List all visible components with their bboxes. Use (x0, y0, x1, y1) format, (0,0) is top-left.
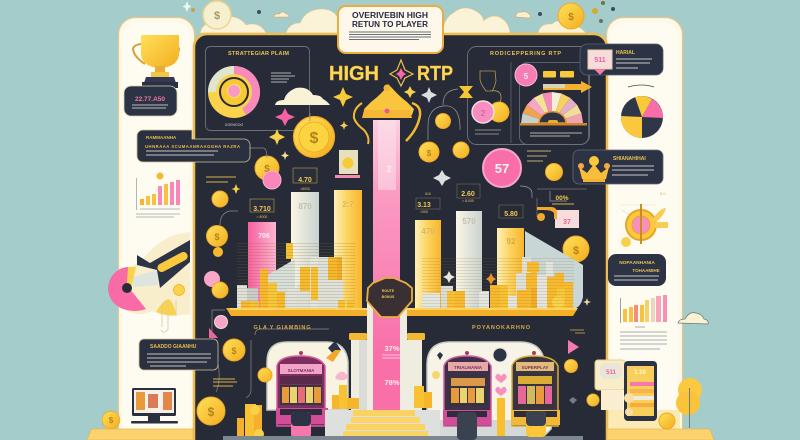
coin: large centre left: $ (310, 130, 319, 147)
slot machine left: SLOTMANIA (288, 368, 315, 373)
small bar chart left (136, 172, 180, 217)
callout: right top: HARIAL (616, 50, 635, 56)
callout: left banner (137, 130, 250, 162)
pillar badge (367, 278, 412, 317)
value tag 3.710: 3.710 (253, 206, 271, 213)
pie chart right (621, 85, 663, 138)
decorative sparkles (232, 86, 591, 306)
columns beside steps (349, 333, 367, 410)
value tag 3.710: ≈ 8000 (257, 215, 267, 219)
hearts (495, 374, 507, 396)
connectors top right (428, 89, 567, 201)
slot machine middle (443, 351, 491, 426)
callout: left banner: RAMMAANHA (146, 135, 177, 140)
phone and gauge card: 511 (606, 370, 616, 376)
title card: OVERIVEBIN HIGH (352, 11, 428, 20)
callout: left banner: UHNRAAA SCUMAANRAAGGHA RAZRA (145, 144, 240, 149)
monitor (131, 388, 178, 424)
chair middle (457, 412, 477, 440)
mini texts (527, 151, 551, 161)
pillar badge: BONUS (382, 295, 395, 299)
callout: right top (580, 44, 663, 75)
callout: right middle: NOPAANHANIA (619, 260, 655, 266)
heading: HIGH RTP: HIGH (329, 63, 379, 85)
00% box (537, 189, 587, 228)
coin: top right (558, 3, 584, 29)
callout: left score: 22.77.A50 (135, 96, 165, 103)
label: right gaming: POYANOKARHNO (472, 325, 531, 331)
bar (456, 211, 482, 308)
chair left (291, 412, 311, 438)
value tag 2.50 (457, 184, 480, 203)
title card (338, 6, 443, 53)
bar: pink: 706 (258, 233, 270, 240)
bar: 92 (507, 237, 516, 246)
value tags right: 3.13 (417, 202, 431, 209)
phone: 1.10 (634, 370, 646, 376)
arch: left slot alcove (267, 342, 348, 410)
arch: right slot alcove (427, 342, 554, 439)
slot machine right: SUPERPLAY (521, 365, 549, 370)
decor: clouds above board (200, 8, 586, 33)
slot machine middle: TRIALMANIA (454, 365, 483, 370)
cloud right of panel (678, 313, 708, 324)
target icon right: 8.0 (660, 191, 666, 196)
pink tag: 511 (594, 57, 606, 64)
decor right of alcove (564, 330, 599, 406)
bar: 470 (421, 227, 435, 236)
sparkles in sky and dots (182, 1, 615, 23)
coin: top cream: $ (214, 10, 220, 22)
pie chart left (108, 267, 146, 311)
big pink token (483, 149, 521, 187)
decorative tree (676, 378, 702, 428)
main dark board (194, 34, 607, 440)
callout: left gaming (139, 339, 218, 370)
coin next to bars (563, 236, 589, 262)
coin stack bottom left (237, 404, 264, 440)
icon: outline figure (480, 71, 501, 106)
steps centre (223, 410, 583, 440)
panel: strategic plan: STRATTEGIAR PLAIM (228, 51, 289, 57)
bar: cream: 870 (298, 202, 312, 211)
small card on board (335, 150, 360, 178)
left side panel (118, 18, 194, 440)
value tags right: 8.6 (425, 191, 432, 196)
central pillar: 37% (384, 344, 400, 353)
central pillar: 78% (384, 378, 400, 387)
alcove decorations (326, 341, 507, 380)
00% box: 00% (555, 195, 569, 202)
chair right (526, 411, 546, 437)
trophy (133, 35, 179, 88)
panel: strategic plan (206, 46, 310, 130)
coin: small left board (212, 191, 228, 207)
mini text left (206, 177, 237, 386)
coin: left bottom: $ (109, 416, 114, 425)
coin: board left column: $ (214, 232, 220, 242)
arrow (543, 81, 592, 93)
panel: rtp round (459, 46, 592, 144)
coin: pair with pink token (255, 156, 281, 189)
marker: pin and paperclip (156, 284, 184, 332)
shelf: right (407, 308, 578, 316)
heading: HIGH RTP (329, 60, 453, 86)
coin: large centre left (294, 116, 334, 158)
chart: left bars and coin stacks (237, 190, 362, 308)
icon: crown (578, 156, 610, 182)
coin: top cream (203, 1, 231, 29)
coins top right board: $ (427, 149, 432, 158)
value tags right: ≈000 (420, 210, 428, 214)
left base (87, 429, 193, 440)
donut chart (208, 66, 260, 118)
coins top right board (419, 114, 562, 180)
00% box: 37 (563, 219, 571, 226)
bar: yellow: 2:7 (342, 200, 354, 209)
coin stacks by machine (332, 385, 359, 409)
coin next to bars: $ (573, 245, 579, 257)
icon: hourglass (459, 86, 473, 98)
value tag 2.50: ≈ 8.000 (462, 199, 474, 203)
token pink small (209, 316, 228, 338)
value tag 4.70 (293, 168, 317, 191)
coin stack between machines (497, 398, 505, 436)
callout: right middle: TOHAAMIHE (632, 268, 660, 273)
cloud on board (275, 88, 330, 105)
chart: right bars and coin stacks (415, 211, 583, 308)
coin and pink token pair (204, 271, 228, 298)
coin: beside left callout (223, 339, 245, 361)
coin: board left column (206, 226, 228, 257)
title card: RETUN TO PLAYER (352, 20, 428, 29)
arrow and pie overlay left (108, 232, 190, 315)
label: left gaming: GLA Y GIAMBING (254, 325, 310, 331)
value tag 5.80: 5.80 (504, 211, 518, 218)
right side panel (606, 18, 682, 440)
panel: rtp round: RODICEPPERING RTP (490, 51, 561, 57)
callout: right crown: SHIANAHIHAI (613, 156, 646, 162)
pillar crown (354, 84, 420, 144)
target icon right (620, 191, 668, 247)
phone and gauge card (595, 360, 675, 429)
coin: left bottom (102, 411, 120, 429)
token: pink 5: 5 (524, 72, 529, 81)
slot machine left (276, 351, 328, 426)
pillar badge: ROUTE (382, 289, 395, 293)
panel: strategic plan: GGENGOG (225, 123, 244, 127)
coin: beside left callout: $ (231, 346, 237, 356)
central pillar: 2 (386, 164, 392, 174)
coin near arch left (258, 368, 272, 382)
bar (497, 228, 524, 308)
value tag 3.710 (250, 199, 274, 219)
roulette wheel (520, 92, 587, 126)
value tag 5.80 (499, 205, 523, 218)
coin stacks (237, 243, 355, 308)
small tags (543, 71, 574, 78)
token: pink 2 with coin: 2 (481, 109, 486, 118)
value tag 2.50: 2.60 (461, 191, 475, 198)
small bar chart right (620, 295, 667, 349)
big pink token: 57 (495, 161, 509, 176)
bar: 570 (462, 217, 476, 226)
coin: pair with pink token: $ (264, 164, 270, 175)
central pillar (367, 120, 407, 410)
callout: left gaming: SAADDO GIAANHU (150, 344, 197, 350)
slot machine right (511, 351, 560, 426)
coin: lower left board (197, 397, 225, 425)
callout: right crown (573, 150, 663, 184)
value tag 4.70: ≈8000 (300, 187, 310, 191)
bar (415, 220, 441, 308)
connector lines left (212, 113, 329, 398)
coin: lower left board: $ (208, 405, 215, 419)
callout: right middle (608, 254, 666, 286)
right base (607, 429, 714, 440)
heading: HIGH RTP: RTP (417, 63, 453, 85)
shelf: left (226, 308, 367, 316)
callout: left score (124, 86, 177, 116)
value tag 4.70: 4.70 (298, 177, 312, 184)
value tags right (416, 191, 440, 214)
coin: top right: $ (568, 12, 574, 23)
